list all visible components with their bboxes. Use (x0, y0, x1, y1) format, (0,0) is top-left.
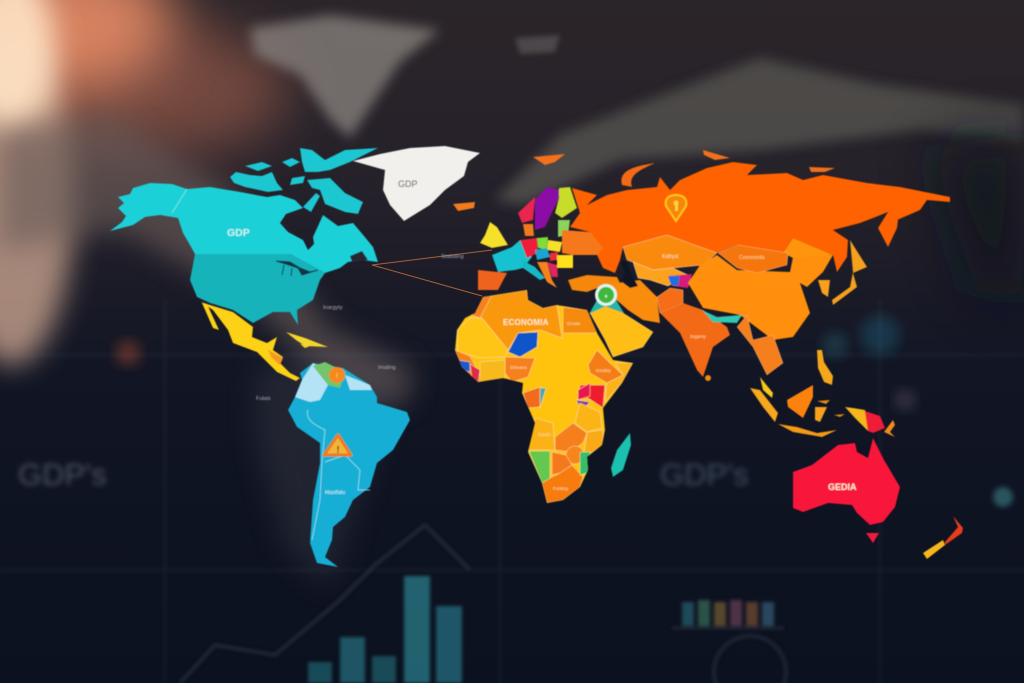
map: Russia (570, 150, 950, 273)
map: Greenland (353, 146, 480, 221)
Italy (522, 260, 545, 280)
Baltics (558, 220, 570, 237)
Japan (832, 240, 867, 305)
Arabia (590, 303, 653, 357)
Spain (478, 270, 507, 290)
icon: orange marker: ! (336, 373, 338, 380)
Arctic islands (703, 150, 835, 172)
label GDP Greenland: GDP (398, 179, 418, 189)
Balkans (537, 262, 557, 288)
Romania (557, 255, 573, 268)
map: New Zealand (923, 516, 963, 559)
map: Europe (478, 187, 603, 290)
icon: warning triangle (324, 435, 351, 456)
Guianas (345, 375, 372, 390)
Zambia (555, 423, 587, 452)
label Nigeria: Ghinans (510, 365, 528, 370)
Sri Lanka (705, 375, 711, 381)
Tanzania (575, 403, 602, 432)
Egypt (563, 307, 597, 333)
Newfoundland gulf (350, 251, 368, 262)
Kenya and Uganda (578, 385, 605, 408)
Bulgaria (547, 262, 558, 277)
map: Asia (568, 235, 867, 381)
Central Asian states (633, 262, 688, 286)
Caribbean (286, 332, 328, 348)
Norway (518, 197, 535, 223)
Botswana (552, 452, 572, 475)
blurred grid (0, 300, 1024, 683)
Brazil and southern cone (288, 363, 410, 567)
label South Africa: Fontiog (553, 486, 569, 491)
Great Lakes (276, 261, 318, 276)
Horn (605, 363, 633, 402)
Colombia (295, 363, 328, 402)
Nigeria (505, 357, 535, 382)
icon: green marker: ♦ (604, 294, 608, 300)
central Europe (535, 248, 550, 260)
map: Svalbard (533, 154, 565, 165)
India (660, 303, 730, 377)
blurred bar chart (180, 525, 470, 683)
map: Australia (793, 438, 900, 543)
France (492, 240, 532, 272)
label GDP: GDP (227, 227, 250, 239)
Iran and Iraq (600, 280, 660, 323)
Namibia green (529, 451, 550, 485)
Mexico and Central America (201, 302, 300, 381)
icon: green marker (589, 284, 624, 314)
blurred GDP labels (18, 457, 749, 492)
Finland (555, 187, 577, 218)
Canadian Arctic islands (230, 148, 378, 214)
Caspian Sea (620, 260, 638, 288)
label Kazakhstan: Kalhyst (662, 254, 679, 260)
Poland (547, 240, 562, 252)
Algeria and Libya (477, 290, 562, 350)
small map labels: Imaling (378, 365, 396, 371)
map: Southeast Asia and Oceania islands (750, 350, 895, 437)
label Economia: ECONOMIA (503, 318, 549, 327)
borders (172, 189, 187, 213)
map: South America (288, 362, 410, 567)
Kyrgyzstan and Tajikistan (668, 274, 692, 288)
Tasmania (866, 533, 879, 543)
Southeast Asia mainland (737, 315, 783, 375)
map: Madagascar (611, 433, 631, 477)
Germany (520, 238, 538, 258)
Hungary (550, 252, 558, 261)
small map labels: Inargyty (323, 305, 343, 311)
icon: location pin (666, 195, 686, 221)
map: North America (110, 148, 378, 381)
Niger blue (508, 332, 538, 357)
label Angola: Gardo (538, 432, 551, 437)
China (688, 255, 833, 340)
Pakistan and Afghanistan (657, 288, 683, 313)
small map labels: Fulais (256, 396, 271, 402)
Venezuela (313, 362, 345, 388)
Novaya Zemlya (621, 163, 655, 187)
icon: orange marker (329, 367, 345, 383)
Himalaya (702, 310, 742, 323)
label GEDIA: GEDIA (828, 482, 857, 492)
country borders (307, 410, 370, 540)
Kamchatka (878, 212, 898, 247)
label Mongolia: Cvonoonda (739, 255, 765, 261)
Canada and Alaska (110, 183, 378, 273)
blurred GDP labels: GDP's (660, 457, 749, 492)
blurred coloured legend bars (672, 600, 786, 683)
Morocco (470, 296, 492, 318)
United States (190, 254, 325, 325)
UK (480, 222, 508, 248)
label India: Srgarny (690, 334, 707, 339)
Angola (528, 418, 555, 450)
West Africa coast (454, 349, 480, 382)
Gabon and Congo (523, 387, 540, 408)
Korea (818, 280, 830, 297)
Ukraine (562, 230, 603, 255)
Ethiopia (588, 350, 623, 383)
Turkey (568, 275, 620, 292)
Sweden (535, 187, 560, 230)
label Egypt: Gcoas (567, 321, 581, 326)
map: Africa (455, 290, 633, 503)
blurred GDP labels: GDP's (18, 457, 107, 492)
Kazakhstan (623, 235, 717, 270)
Mozambique (580, 430, 603, 475)
Mongolia (718, 245, 788, 273)
connector lines (372, 250, 492, 296)
label Brazil small: Hastfalu (325, 490, 345, 496)
Czechia (537, 237, 548, 250)
map: Iceland (453, 202, 475, 211)
icon: warning triangle: ! (336, 445, 340, 456)
small map labels: Statisting (441, 254, 464, 260)
Denmark (523, 224, 534, 236)
label Ethiopia: Kmsbiy (596, 368, 612, 373)
Mauritania and Mali (457, 318, 508, 358)
New Guinea (845, 407, 868, 431)
Manchuria (783, 238, 833, 258)
world map (110, 146, 963, 567)
small map labels (256, 254, 464, 402)
South Africa (542, 465, 583, 503)
Zimbabwe (566, 446, 584, 464)
